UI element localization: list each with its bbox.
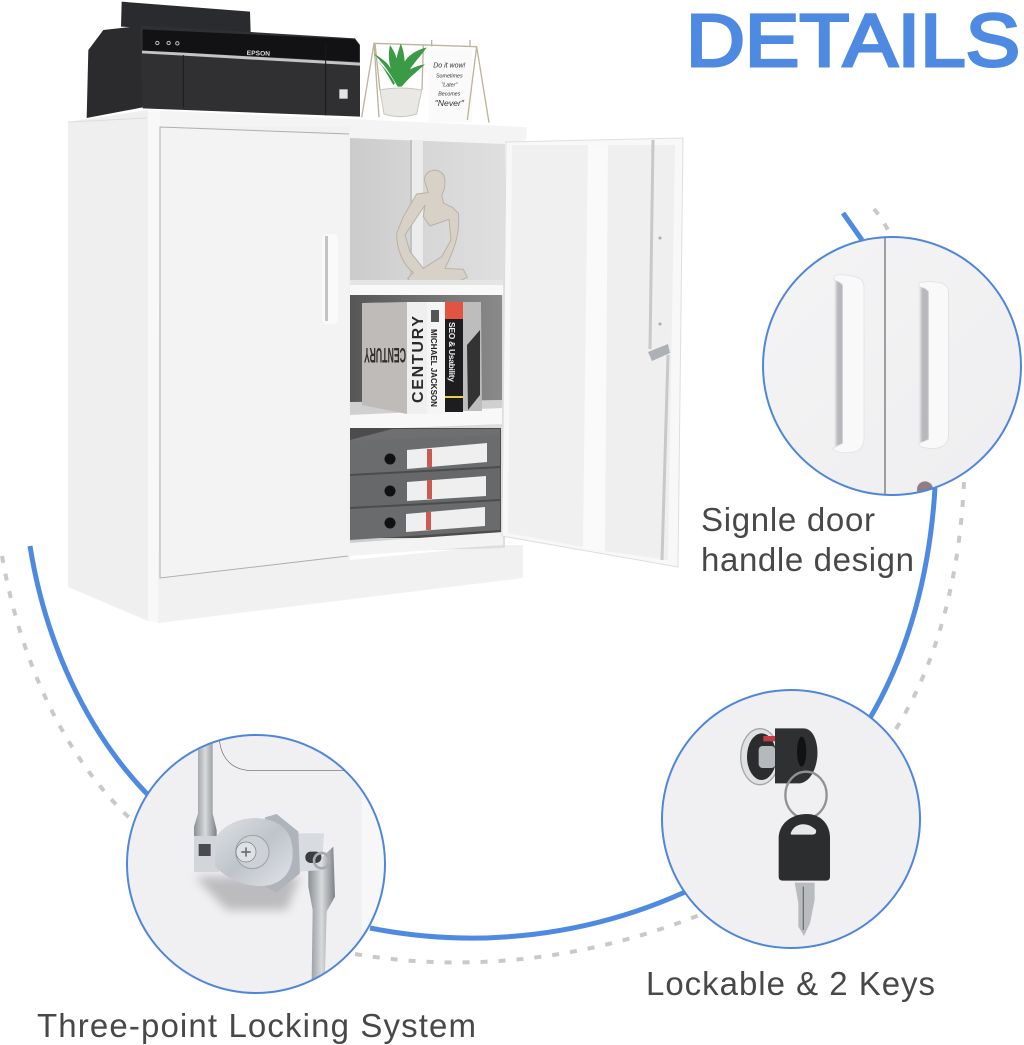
- mechanism shadow: [195, 877, 300, 910]
- screw: [236, 835, 269, 869]
- third spine title: SEO & Usability: [447, 322, 457, 382]
- printer top band: [143, 29, 359, 62]
- label: handle: [701, 501, 914, 578]
- rivets: [658, 236, 662, 240]
- book pages: [362, 302, 407, 414]
- key fob: [779, 814, 830, 881]
- upper rod: [194, 744, 217, 836]
- closed left door: [160, 127, 349, 578]
- plant and note card decor: [362, 40, 489, 123]
- locking rod: [650, 140, 668, 560]
- title: DETAILS: [686, 0, 1020, 82]
- door handle: [322, 234, 338, 324]
- panel cutout line: [219, 740, 347, 771]
- detail circle: door handles: [763, 235, 1021, 497]
- pot: [380, 88, 422, 117]
- key head in lock: [775, 728, 817, 783]
- lock edge: [917, 481, 933, 492]
- books: [362, 302, 482, 414]
- white spine: [407, 302, 427, 414]
- note card: [429, 48, 472, 122]
- gold frame: [362, 40, 489, 123]
- shelf one: [350, 280, 503, 296]
- right handle: [918, 282, 948, 448]
- printer front: [140, 25, 360, 117]
- printer: [87, 2, 360, 118]
- label: handle: handle design: [701, 541, 914, 578]
- plant: [373, 43, 427, 87]
- printer side: [87, 26, 144, 118]
- lock cylinder: [741, 729, 779, 785]
- card text: [433, 62, 465, 108]
- third spine: [445, 302, 463, 412]
- label: keys: Lockable & 2 Keys: [646, 965, 935, 1002]
- connector arcs: [2, 209, 964, 962]
- white metal cabinet: [68, 110, 683, 623]
- binders: [350, 429, 500, 540]
- split ring: [785, 772, 827, 818]
- detail circle: lock and keys: [662, 690, 920, 948]
- round plate: [215, 818, 293, 886]
- detail circle: locking system: [127, 730, 392, 997]
- cabinet top: [68, 110, 527, 145]
- label: handle: Signle door: [701, 501, 875, 538]
- vertical shadow: [755, 790, 779, 923]
- key blade: [795, 883, 815, 936]
- right tab: [297, 833, 324, 872]
- bottom interior lip: [348, 532, 503, 556]
- front frame: [148, 110, 160, 623]
- door latch: [648, 344, 670, 361]
- spine title: CENTURY: [410, 316, 427, 403]
- binder bay back: [350, 428, 501, 538]
- cabinet interior: [350, 138, 505, 552]
- sculpture: [397, 170, 467, 284]
- lower rod: [308, 847, 335, 980]
- printer logo: EPSON: [247, 50, 270, 58]
- sticker: [339, 89, 348, 99]
- open right door: [502, 138, 683, 567]
- silver stripe: [142, 51, 360, 66]
- fourth book: [463, 302, 482, 411]
- card text: Do it wow!: [433, 62, 465, 69]
- card text: "Never": [435, 98, 465, 108]
- right edge strip: [362, 730, 392, 997]
- second spine title: MICHAEL JACKSON: [429, 329, 439, 407]
- hex backing: [265, 814, 300, 893]
- card text: Sometimes: [436, 73, 463, 79]
- card text: Becomes: [438, 91, 461, 97]
- buttons: [156, 41, 179, 45]
- card text: "Later": [441, 82, 458, 88]
- left tab: [194, 836, 219, 872]
- handle slot shadows: [836, 280, 929, 447]
- second spine: [427, 302, 445, 414]
- shelf two: [350, 400, 502, 430]
- shelf two back: [350, 295, 502, 411]
- left handle: [833, 275, 864, 453]
- label: locking system: Three-point Locking System: [37, 1007, 476, 1044]
- door gap: [884, 238, 886, 494]
- paper tray: [121, 2, 251, 33]
- white metal cabinet: CENTURY: [364, 343, 406, 366]
- cabinet side: [68, 110, 148, 621]
